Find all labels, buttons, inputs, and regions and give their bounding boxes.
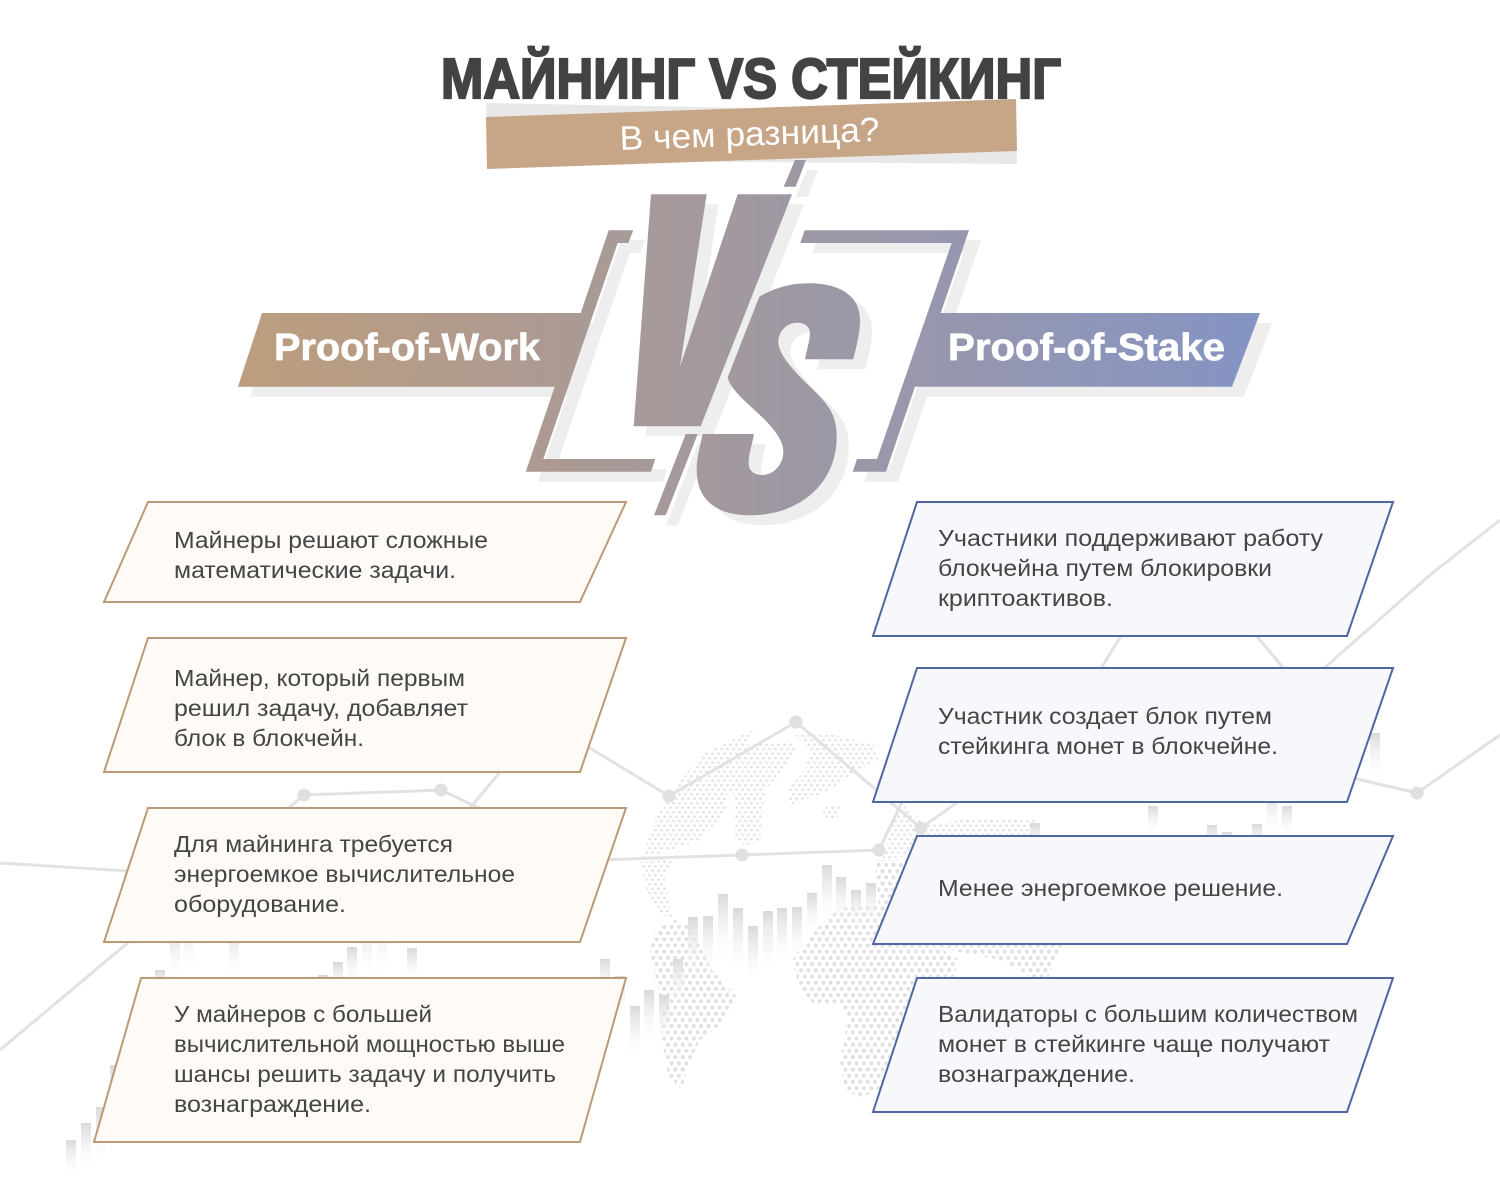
panel: proof-of-stake card 1 [873,502,1393,636]
text: stake card 3: Менее энергоемкое решение. [938,875,1283,901]
text: card 1: математические задачи. [174,557,456,583]
banner: Proof-of-Stake with right bracket [800,230,1260,472]
vs emblem letters [634,160,860,515]
banner: Proof-of-Work with left bracket [238,230,655,472]
panel: proof-of-stake card 2 [873,668,1393,802]
text: stake card 2: стейкинга монет в блокчейне. [938,733,1278,759]
text: card 4: вознаграждение. [174,1091,371,1117]
text: stake card 1: криптоактивов. [938,585,1113,611]
text: stake card 2: Участник создает блок путем [938,703,1272,729]
text: card 4: вычислительной мощностью выше [174,1031,565,1057]
panel: proof-of-stake card 3 [873,836,1393,944]
panel: proof-of-work card 3 [104,808,626,942]
panel: proof-of-work card 4 [94,978,626,1142]
panel: proof-of-work card 2 [104,638,626,772]
text: stake card 1: блокчейна путем блокировки [938,555,1272,581]
background: chart lines with nodes [0,520,1500,1050]
text: card 1: Майнеры решают сложные [174,527,488,553]
background: dotted world map [640,730,1062,1098]
text: card 4: У майнеров с большей [174,1001,432,1027]
label: Proof-of-Stake: Proof-of-Stake [948,327,1225,369]
text: card 3: Для майнинга требуется [174,831,453,857]
text: stake card 4: вознаграждение. [938,1061,1135,1087]
text: card 2: Майнер, который первым [174,665,465,691]
text: card 3: энергоемкое вычислительное [174,861,515,887]
text: stake card 4: Валидаторы с большим количеством [938,1001,1358,1027]
title: МАЙНИНГ VS СТЕЙКИНГ [441,46,1061,110]
subtitle text: В чем разница? [619,111,880,158]
panel: proof-of-work card 1 [104,502,626,602]
text: stake card 4: монет в стейкинге чаще получают [938,1031,1330,1057]
panel: proof-of-stake card 4 [873,978,1393,1112]
text: card 4: шансы решить задачу и получить [174,1061,556,1087]
text: card 2: решил задачу, добавляет [174,695,468,721]
text: stake card 1: Участники поддерживают работу [938,525,1323,551]
vs emblem shadow [250,170,1272,525]
subtitle ribbon [486,99,1017,169]
background: chart bars [66,733,1380,1178]
label: Proof-of-Work: Proof-of-Work [274,327,541,369]
text: card 2: блок в блокчейн. [174,725,364,751]
text: card 3: оборудование. [174,891,346,917]
